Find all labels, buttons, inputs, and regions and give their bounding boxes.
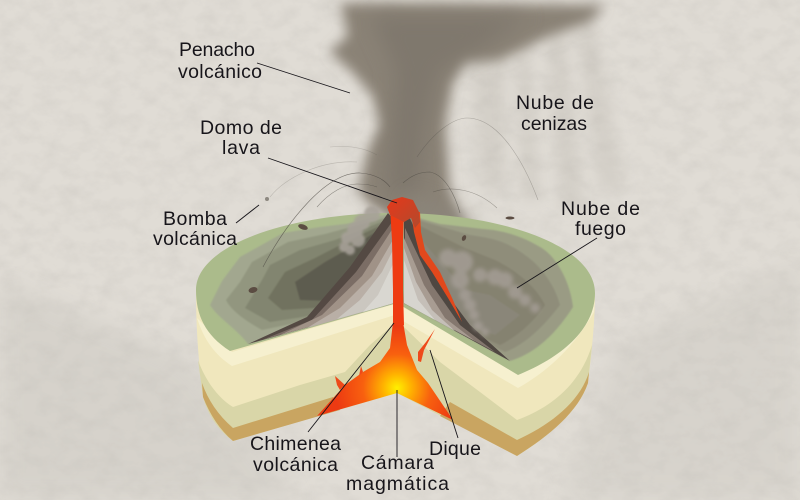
lava flow bbox=[411, 212, 462, 322]
right flank layers bbox=[404, 214, 510, 361]
label: Penacho volcánico: volcánico bbox=[178, 61, 262, 83]
lava dome bbox=[387, 197, 420, 228]
label: Penacho volcánico: Penacho bbox=[179, 39, 255, 61]
volcanic plume bbox=[330, 3, 605, 300]
left crater interior terraces bbox=[210, 213, 394, 344]
sage layer right bbox=[397, 326, 592, 456]
label: Chimenea volcánica: Chimenea bbox=[250, 433, 341, 455]
top rim of green ground bbox=[196, 213, 595, 375]
pale upper band bbox=[197, 304, 398, 366]
label: Bomba volcánica: volcánica bbox=[153, 228, 237, 250]
label: Penacho volcánico bbox=[178, 39, 262, 83]
sage layer left bbox=[198, 323, 397, 441]
label: Domo de lava: Domo de bbox=[200, 117, 282, 139]
label: Nube de cenizas: Nube de bbox=[516, 92, 594, 114]
dikes bbox=[335, 329, 435, 390]
label: Nube de cenizas: cenizas bbox=[521, 113, 587, 135]
right crater interior terraces bbox=[404, 214, 573, 361]
label: Nube de fuego: Nube de bbox=[561, 198, 640, 220]
label: Nube de fuego: fuego bbox=[575, 218, 626, 240]
brown base layer right bbox=[440, 372, 589, 456]
volcanic conduit bbox=[390, 208, 404, 325]
label: Dique: Dique bbox=[429, 438, 481, 460]
magma chamber bbox=[317, 322, 453, 420]
label: Nube de cenizas bbox=[516, 92, 594, 135]
label: Chimenea volcánica bbox=[250, 433, 341, 476]
label: Domo de lava bbox=[200, 117, 282, 159]
label: Domo de lava: lava bbox=[222, 137, 260, 159]
volcanic bombs bbox=[248, 197, 514, 294]
label: Cámara magmática bbox=[346, 452, 449, 495]
left wall and face base bbox=[196, 290, 397, 441]
right fire cloud bbox=[439, 249, 540, 336]
brown base layer left bbox=[202, 383, 340, 441]
ash rain streaks bbox=[470, 25, 625, 210]
label: Cámara magmática: Cámara bbox=[361, 452, 434, 474]
label: Cámara magmática: magmática bbox=[346, 473, 449, 495]
left fire cloud bbox=[339, 206, 380, 255]
label leader lines bbox=[236, 63, 597, 457]
label: Bomba volcánica bbox=[153, 208, 237, 250]
volcanic bomb trajectories bbox=[263, 118, 538, 267]
label: Nube de fuego bbox=[561, 198, 640, 240]
right wall and face base bbox=[397, 293, 595, 456]
label: Chimenea volcánica: volcánica bbox=[253, 454, 338, 476]
label: Bomba volcánica: Bomba bbox=[163, 208, 227, 230]
cross-section block of ground bbox=[196, 290, 595, 456]
left flank layers bbox=[248, 213, 394, 344]
